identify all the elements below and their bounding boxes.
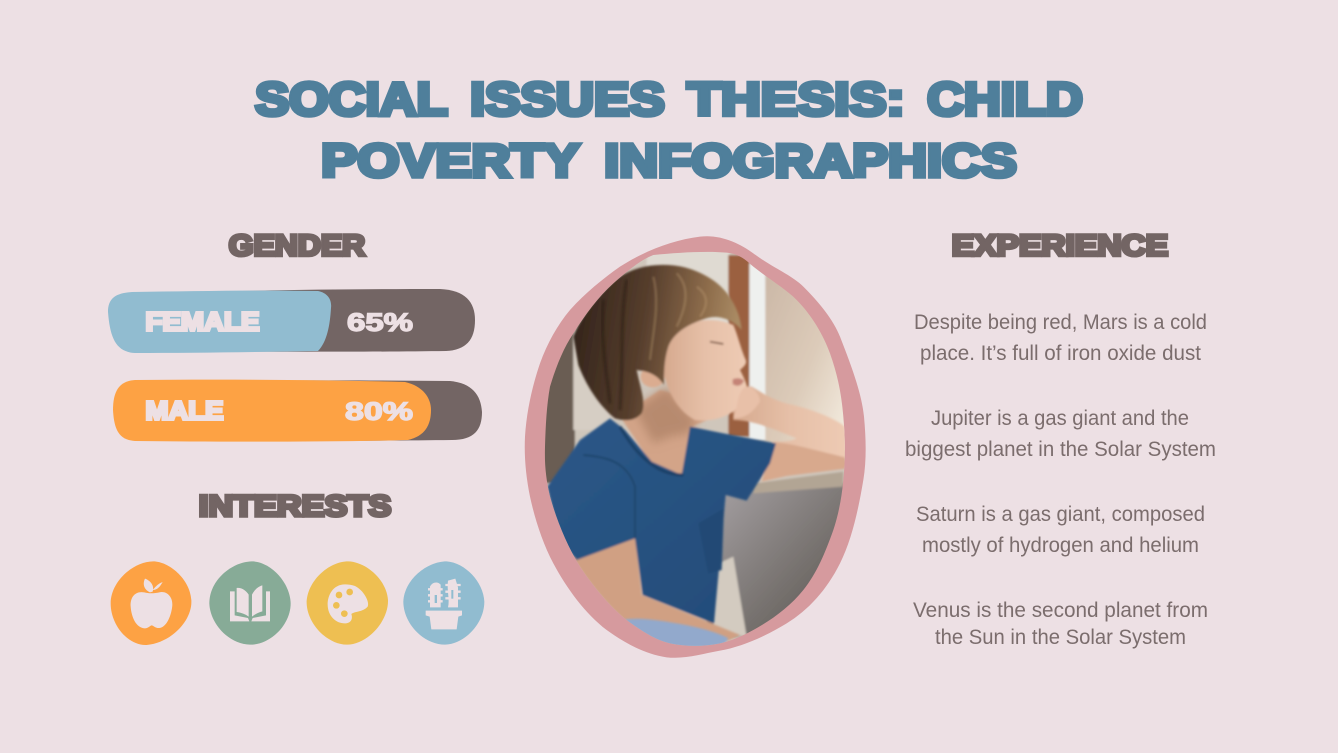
value: 80%: 80% [345, 398, 413, 426]
arm [733, 387, 848, 482]
title: SOCIAL [255, 73, 448, 125]
label: female: FEMALE [146, 306, 260, 336]
experience: jupiter: Jupiter is a gas giant and the [931, 407, 1189, 430]
experience: mars: Despite being red, Mars is a cold [914, 311, 1207, 334]
interests icons [111, 561, 484, 645]
experience: saturn: Saturn is a gas giant, composed [916, 503, 1205, 526]
heading: experience: EXPERIENCE [952, 230, 1168, 262]
bar track: female [150, 289, 475, 352]
heading: gender: GENDER [229, 230, 366, 262]
photo: boy at window [540, 247, 850, 650]
title [255, 73, 1083, 186]
bar: male 80% [113, 380, 482, 442]
experience: venus: the Sun in the Solar System [935, 626, 1186, 649]
title: CHILD [927, 73, 1083, 125]
neck [622, 390, 706, 476]
icon: cactus [403, 561, 484, 645]
lower arm [573, 537, 740, 641]
lap cloth [625, 618, 729, 646]
title: THESIS: [687, 73, 905, 125]
shirt [547, 418, 776, 623]
experience: mars [914, 311, 1207, 365]
bar track: male [150, 380, 482, 441]
title: POVERTY [321, 134, 580, 186]
icon: apple [111, 561, 191, 645]
title: ISSUES [470, 73, 665, 125]
value: 65%: 65% [347, 309, 413, 337]
icon: book [209, 561, 291, 645]
bar fill: female [108, 291, 331, 353]
icon: palette [307, 561, 388, 645]
photo frame [525, 236, 866, 658]
title: INFOGRAPHICS [604, 134, 1017, 186]
heading: interests: INTERESTS [199, 490, 391, 523]
experience: saturn [916, 503, 1205, 557]
hair [573, 265, 742, 420]
bar: female 65% [108, 289, 475, 353]
frame: pink blob [525, 236, 866, 658]
bar fill: male [113, 380, 431, 442]
experience: mars: place. It’s full of iron oxide dust [920, 342, 1201, 365]
experience: saturn: mostly of hydrogen and helium [922, 534, 1199, 557]
experience: venus: Venus is the second planet from [913, 599, 1208, 622]
label: male: MALE [146, 396, 224, 426]
experience: venus [913, 599, 1208, 649]
experience: jupiter: biggest planet in the Solar System [905, 438, 1216, 461]
experience: jupiter [905, 407, 1216, 461]
face [663, 320, 747, 421]
